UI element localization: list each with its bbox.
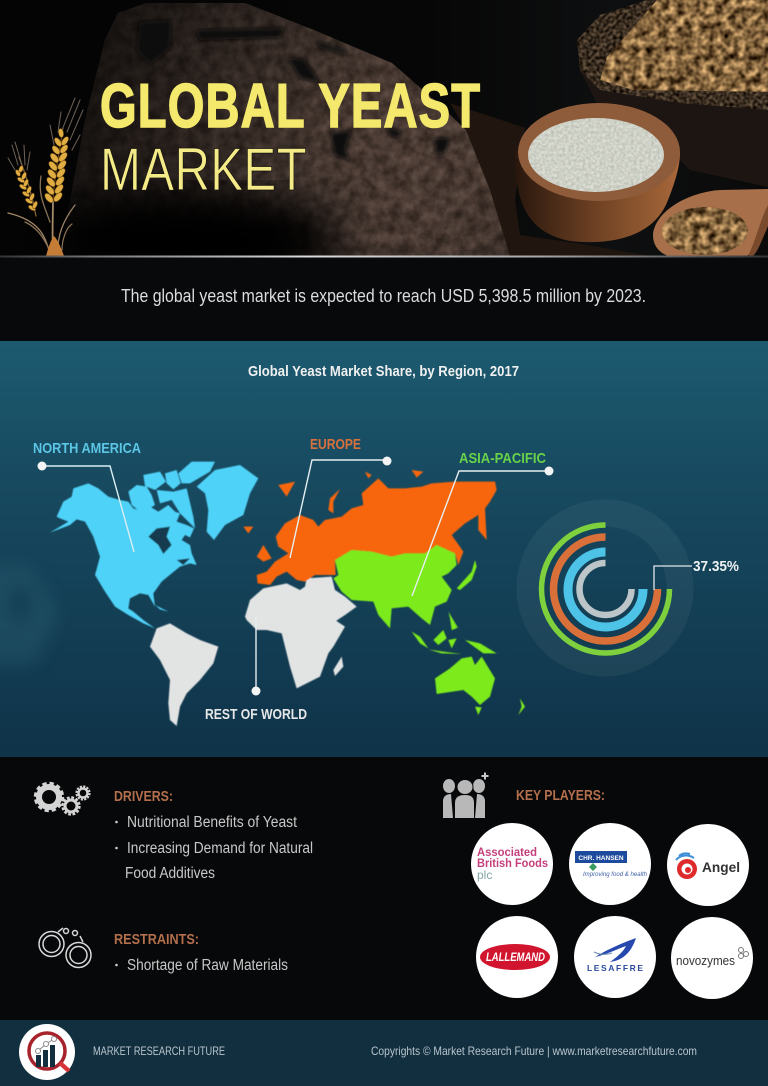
footer <box>0 1020 768 1086</box>
restraints: Shortage of Raw Materials <box>127 957 288 974</box>
callout: Europe: EUROPE <box>310 436 361 453</box>
title: GLOBAL YEAST <box>100 71 480 141</box>
logo: Lallemand <box>476 916 558 998</box>
wooden spoon of grain <box>653 189 768 256</box>
drivers: DRIVERS: <box>114 788 173 805</box>
logo: Novozymes <box>671 917 753 999</box>
world map <box>50 462 525 726</box>
drivers: Food Additives <box>125 865 215 882</box>
callout: Rest of World <box>205 617 307 723</box>
logo: Chr. Hansen <box>569 823 651 905</box>
drivers: Nutritional Benefits of Yeast <box>127 814 298 831</box>
callout: Europe <box>290 436 392 558</box>
logo: Angel <box>667 824 749 906</box>
bread loaf <box>40 3 510 290</box>
logo: Chr. Hansen: CHR. HANSEN <box>578 855 624 862</box>
wooden board behind bread <box>450 103 650 256</box>
grain sack <box>577 0 768 187</box>
wooden bowl of flour <box>515 103 680 242</box>
callout: North America: NORTH AMERICA <box>33 440 141 457</box>
market forecast band: The global yeast market is expected to reach USD 5,398.5 million by 2023. <box>121 286 646 306</box>
market forecast band <box>0 256 768 341</box>
icon: handcuffs <box>39 928 91 968</box>
key players heading: KEY PLAYERS: <box>516 787 605 804</box>
callout: Asia-Pacific: ASIA-PACIFIC <box>459 450 546 467</box>
callout: Asia-Pacific <box>412 450 554 596</box>
panel: regional market share <box>0 341 768 757</box>
panel: drivers, restraints and key players <box>0 757 768 1020</box>
region: North America <box>50 462 258 628</box>
logo: Associated British Foods <box>471 823 553 905</box>
icon: wheat stalks <box>8 98 83 256</box>
drivers: Increasing Demand for Natural <box>127 840 313 857</box>
callout: North America <box>33 440 141 552</box>
restraints: RESTRAINTS: <box>114 931 199 948</box>
logo: Novozymes: novozymes <box>676 953 735 968</box>
title <box>100 71 480 203</box>
radial bar chart: 37.35% <box>693 559 739 575</box>
logo: Lallemand: LALLEMAND <box>486 950 545 964</box>
logo: Associated British Foods: British Foods <box>477 858 548 870</box>
region: Europe <box>243 470 497 585</box>
logo: Associated British Foods: plc <box>477 868 492 882</box>
logo: Chr. Hansen: Improving food & health <box>583 872 648 878</box>
icon: people <box>443 772 488 818</box>
logo: Associated British Foods: Associated <box>477 847 537 859</box>
radial bar chart <box>530 513 739 663</box>
region: Rest of World <box>150 577 357 726</box>
icon: gears <box>36 784 90 814</box>
brand name: MARKET RESEARCH FUTURE <box>93 1044 225 1058</box>
restraints <box>114 931 288 974</box>
logo: Angel: Angel <box>702 859 740 875</box>
drivers <box>114 788 313 882</box>
hero banner photo <box>0 0 768 290</box>
copyright: Copyrights © Market Research Future | www.marketresearchfuture.com <box>371 1044 697 1058</box>
title: MARKET <box>100 135 307 203</box>
region: Asia-Pacific <box>333 545 525 715</box>
logo: Lesaffre: LESAFFRE <box>587 963 643 973</box>
chart title: Global Yeast Market Share, by Region, 2017 <box>248 363 519 380</box>
callout: Rest of World: REST OF WORLD <box>205 706 307 723</box>
logo: Market Research Future <box>19 1024 75 1080</box>
logo: Lesaffre <box>574 916 656 998</box>
